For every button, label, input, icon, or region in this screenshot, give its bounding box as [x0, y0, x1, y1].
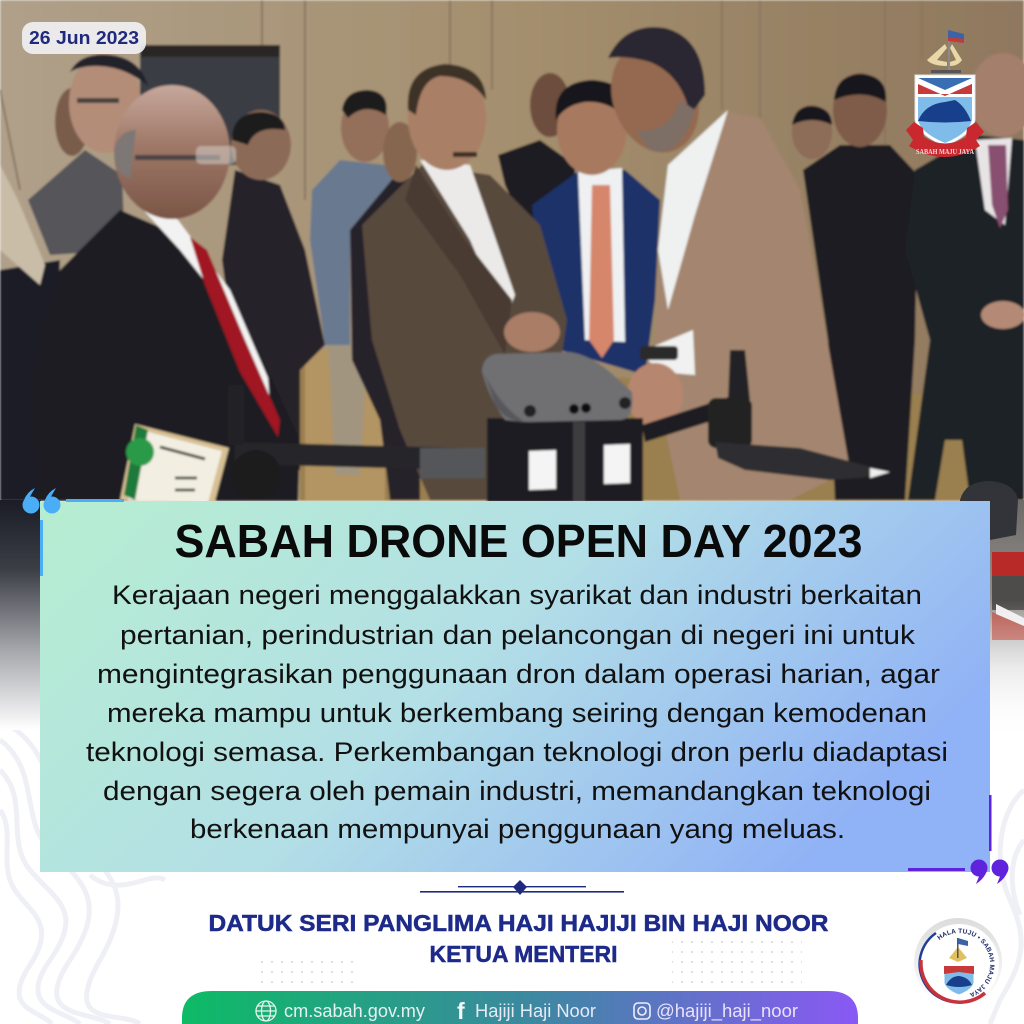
- person: elder in black suit with red tie: [30, 85, 300, 501]
- date badge: 26 Jun 2023: [29, 28, 139, 48]
- panel body text: mengintegrasikan penggunaan dron dalam operasi harian, agar: [97, 659, 940, 689]
- drone: black body: [487, 418, 643, 502]
- panel body text: teknologi semasa. Perkembangan teknologi dron perlu diadaptasi: [86, 737, 948, 767]
- person: man in black far right: [792, 73, 918, 500]
- panel body text: pertanian, perindustrian dan pelancongan di negeri ini untuk: [120, 620, 916, 650]
- website: cm.sabah.gov.my: [284, 1001, 425, 1021]
- icon: facebook: f: [457, 998, 465, 1024]
- drone: left arm: [234, 442, 485, 471]
- panel title: SABAH DRONE OPEN DAY 2023: [174, 515, 862, 567]
- panel body text: mereka mampu untuk berkembang seiring dengan kemodenan: [107, 698, 927, 728]
- person: man in grey suit: [28, 53, 148, 255]
- icon: Sabah coat of arms: [906, 30, 984, 157]
- person: man in blue suit: [532, 80, 660, 375]
- certificate with green ribbon: [120, 424, 229, 505]
- panel body text: dengan segera oleh pemain industri, memandangkan teknologi: [103, 776, 931, 806]
- photo: delegation inspecting a drone: [0, 0, 1024, 505]
- left faded photo strip: [0, 500, 41, 730]
- right faded photo strip: [960, 481, 1024, 740]
- door: [140, 45, 280, 165]
- person: man with purple tie: [905, 53, 1024, 500]
- panel body text: Kerajaan negeri menggalakkan syarikat dan industri berkaitan: [112, 580, 922, 610]
- background: wavy line pattern: [0, 720, 1024, 1024]
- speaker name and title: DATUK SERI PANGLIMA HAJI HAJIJI BIN HAJI NOOR: [208, 910, 829, 936]
- drone: right arm and motor: [642, 395, 740, 442]
- facebook name: Hajiji Haji Noor: [475, 1001, 596, 1021]
- speaker name and title: KETUA MENTERI: [430, 941, 618, 967]
- drone: white stickers: [529, 450, 556, 490]
- drone: grey sensor head: [482, 352, 632, 422]
- person: man in dark jacket: [222, 110, 325, 470]
- panel body text: [86, 580, 948, 844]
- icon: globe: [256, 1001, 276, 1021]
- dot pattern: right: [672, 938, 802, 1000]
- instagram handle: @hajiji_haji_noor: [656, 1001, 798, 1022]
- person: minister in brown check suit: [362, 64, 567, 500]
- person: man in tan jacket: [596, 27, 850, 500]
- date badge: [22, 22, 146, 54]
- icon: round Sabah seal: [914, 918, 1002, 1004]
- person: man in blue shirt: [310, 90, 420, 500]
- person: woman at far left edge: [0, 165, 60, 501]
- icon: instagram: [634, 1003, 650, 1019]
- panel body text: berkenaan mempunyai penggunaan yang meluas.: [190, 814, 845, 844]
- wall panel joints: [0, 0, 922, 200]
- drone: propeller: [715, 442, 890, 480]
- footer social pill: [182, 991, 858, 1024]
- speaker name and title: [208, 910, 829, 967]
- drone: [228, 350, 890, 502]
- icon: closing quote marks: [908, 795, 1008, 884]
- person: man in black behind centre: [498, 73, 575, 240]
- person: rear man with glasses left: [55, 88, 89, 156]
- diamond divider: [420, 880, 624, 895]
- wood wall: [0, 0, 1024, 501]
- panel: statement: [40, 501, 990, 872]
- carpet floor: [300, 360, 1024, 501]
- icon: Sabah coat of arms: SABAH MAJU JAYA: [916, 148, 974, 156]
- icon: opening quote marks: [22, 488, 124, 576]
- icon: round Sabah seal: HALA TUJU • SABAH MAJU JAYA: [937, 928, 994, 997]
- dot pattern: left: [255, 954, 353, 990]
